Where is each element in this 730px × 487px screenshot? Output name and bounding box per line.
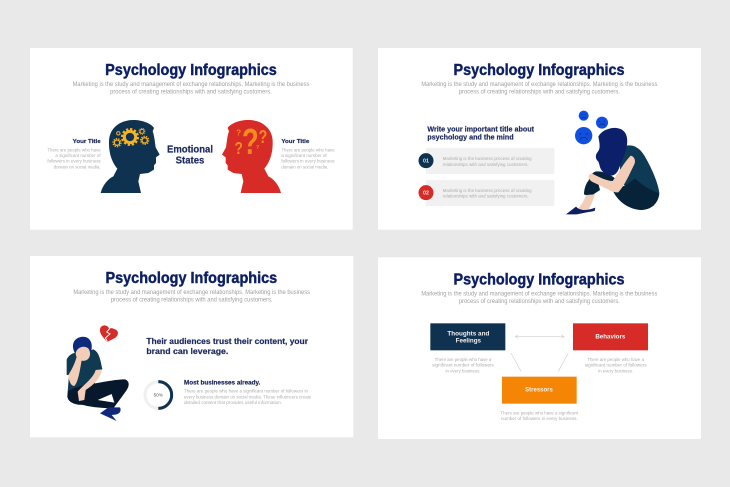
right text block: Your Title [281,139,309,145]
text: behaviors description [585,357,647,375]
text block: most businesses: every business domain on social media. These influencers create [184,394,312,400]
right text block: a significant number of [281,153,327,159]
item 02: relationships with and satisfying customers. [443,194,529,200]
text: behaviors description: There are people who have a [587,357,644,363]
heading: Write your important title about [427,124,535,133]
icon: red head with question marks: ? [259,126,267,147]
icon: red head with question marks: ? [234,138,243,158]
donut chart: 50%: 50% [154,393,163,398]
heading [427,124,535,142]
left text block: domain on social media. [54,164,101,170]
text: thoughts description: significant number of followers [432,363,494,369]
donut chart: 50% [145,382,172,408]
left text block: followers in every business [47,159,101,165]
panel: audiences trust [30,256,353,437]
text: thoughts description: in every business. [445,369,480,375]
subtitle: Marketing is the study and management of exchange relationships. Marketing is the business [73,289,311,296]
illustration: sitting woman [566,128,659,214]
text: stressors description: number of followers in every business. [501,416,578,422]
item 01 [418,148,554,174]
arrows [511,335,568,371]
subtitle: Marketing is the study and management of exchange relationships. Marketing is the business [73,81,310,88]
text: behaviors description: significant number of followers [585,363,647,369]
icon: red head with question marks: ? [256,145,260,151]
subtitle [73,81,310,96]
item 01: relationships with and satisfying customers. [443,162,529,168]
heading: Their audiences trust their content, your [146,336,309,346]
center label: Emotional [167,145,213,156]
subtitle [421,290,658,305]
left text block: a significant number of [55,153,101,159]
right text block: There are people who have [281,147,335,153]
text: stressors description: There are people who have a significant [500,410,579,416]
panel: stressors diagram [378,257,701,439]
center label [167,145,213,167]
icon: navy head with gears [101,120,160,193]
heading: brand can leverage. [146,346,228,356]
icon: red head with question marks: ? [242,121,259,162]
box: stressors [502,377,577,404]
title: Psychology Infographics [453,271,625,288]
title: Psychology Infographics [105,62,277,79]
illustration: sitting man [67,337,129,421]
box: thoughts and feelings: Thoughts and [447,330,489,337]
text block: most businesses: There are people who have a significant number of followers in [184,389,308,395]
text: behaviors description: in every business. [598,369,633,375]
heading [146,336,309,356]
text block: most businesses [184,380,312,406]
box: behaviors [573,323,648,350]
subtitle: process of creating relationships with and satisfying customers. [110,89,272,96]
subtitle: Marketing is the study and management of exchange relationships. Marketing is the business [421,290,658,297]
box: thoughts and feelings [430,323,505,350]
text: thoughts description [432,357,494,375]
left text block: Your Title [73,139,101,145]
subtitle: process of creating relationships with and satisfying customers. [111,297,273,304]
box: behaviors: Behaviors [595,333,626,340]
right text block: domain on social media. [281,164,328,170]
heading: psychology and the mind [427,133,514,142]
subtitle [421,81,658,96]
left text block [47,139,101,170]
right text block [281,139,335,170]
box: thoughts and feelings: Feelings [456,338,481,345]
item 02: 02 [423,191,429,197]
title: Psychology Infographics [453,62,625,79]
text block: most businesses: Most businesses already. [184,380,261,387]
item 01: Marketing is the business process of creating [443,156,532,162]
icon: broken heart [100,325,118,342]
title: Psychology Infographics [105,270,277,287]
right text block: followers in every business [281,159,335,165]
text: stressors description [500,410,579,422]
text: thoughts description: There are people who have a [435,357,492,363]
left text block: There are people who have [47,147,101,153]
item 01: 01 [423,158,429,164]
subtitle: process of creating relationships with and satisfying customers. [459,89,620,96]
icon: red head with question marks: ? [236,128,241,138]
item 02 [418,180,554,206]
panel: write your important title [378,48,701,230]
center label: States [176,156,204,167]
box: stressors: Stressors [525,387,553,394]
panel: emotional states [30,48,353,230]
icon: sad faces [575,111,608,144]
icon: red head with question marks [222,120,281,193]
text block: most businesses: detailed content that provides useful information. [184,400,282,406]
subtitle [73,289,311,304]
item 02: Marketing is the business process of creating [443,188,532,194]
subtitle: process of creating relationships with and satisfying customers. [459,298,620,305]
subtitle: Marketing is the study and management of exchange relationships. Marketing is the business [421,81,658,88]
